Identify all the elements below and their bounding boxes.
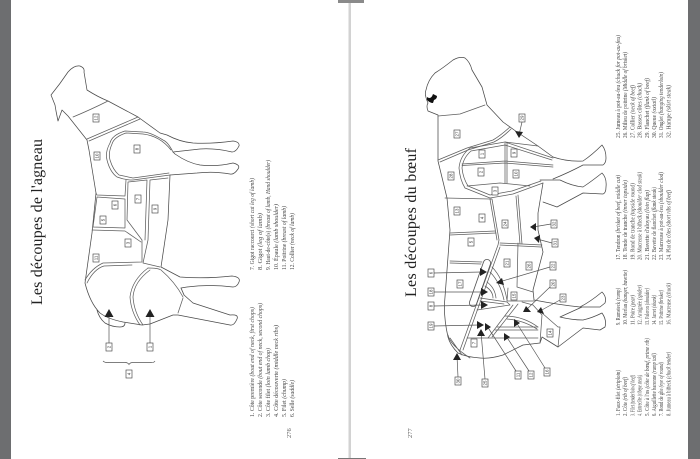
beef cuts list, column 4: 31. Onglet (hanging tenderloin) [658, 72, 665, 138]
lamb cuts list: 4. Côte découverte (middle neck ribs) [273, 325, 280, 417]
lamb number boxes: 7 [136, 197, 140, 200]
beef number boxes: 4 [480, 216, 484, 219]
beef cuts list, column 1: 2. Côte (rib of beef) [622, 377, 629, 416]
beef number boxes: 28 [448, 173, 454, 178]
beef cuts list, column 3 [615, 172, 672, 260]
beef number boxes: 30 [456, 378, 460, 383]
beef muzzle [427, 94, 437, 103]
lamb number boxes: 6 [112, 203, 118, 206]
beef cuts list, column 3: 20. Macreuse à bifteck (shoulder clod steak) [636, 172, 644, 260]
beef cuts list, column 2 [615, 270, 672, 325]
lamb number boxes: 4 [126, 372, 132, 375]
lamb number boxes: 12 [94, 115, 98, 120]
lamb brace [103, 361, 155, 364]
beef cuts list, column 2: 16. Macreuse (chuck) [666, 283, 672, 325]
page spine [338, 0, 366, 459]
beef cuts list, column 2: 14. Jarret (shank) [651, 295, 658, 325]
lamb number boxes: 10 [94, 153, 100, 158]
lamb number boxes [93, 114, 158, 378]
beef cuts list, column 1: 3. Filet (tenderloin of beef) [630, 375, 636, 416]
beef cuts list, column 4: 29. Flanchet (flank of beef) [644, 78, 651, 138]
lamb cuts list [249, 160, 296, 417]
beef cuts list, column 1: 1. Faux-filet (striploin) [615, 370, 622, 416]
lamb cuts list: 12. Collier (neck of lamb) [289, 213, 296, 270]
beef cuts list, column 4 [615, 35, 672, 138]
beef cuts list, column 3: 17. Tendron (brisket of beef, middle cut) [615, 175, 622, 260]
beef number boxes: 16 [544, 369, 550, 374]
beef number boxes: 17 [458, 281, 462, 286]
beef cuts list, column 3: 19. Rond de tranche (topside round) [630, 183, 636, 260]
beef number boxes: 26 [526, 263, 532, 268]
beef cuts list, column 1: 7. Rond de gîte (eye of round) [658, 362, 665, 416]
beef cuts list, column 3: 21. Bavette d'aloyau (loin flap) [644, 190, 651, 260]
beef pill-shaped cut [473, 263, 487, 303]
beef number boxes: 13 [454, 208, 460, 213]
page number 277: 277 [407, 428, 414, 438]
lamb diagram [51, 66, 239, 378]
beef number boxes: 3 [492, 189, 498, 192]
beef number boxes: 22 [550, 263, 556, 268]
beef number boxes: 11 [516, 372, 520, 377]
lamb number boxes: 9 [152, 207, 158, 210]
beef cuts list, column 4: 26. Milieu de poitrine (Middle of brisket) [622, 52, 629, 138]
beef diagram [425, 57, 606, 387]
title: beef cuts: Les découpes du bœuf [403, 147, 420, 297]
lamb cuts list: 9. Haut-de-côte(s) (breast of lamb, Hand shoulder) [265, 160, 272, 270]
beef number boxes: 21 [504, 260, 510, 265]
lamb cuts list: 6. Selle (saddle) [289, 380, 296, 417]
beef number boxes: 27 [454, 131, 460, 136]
beef cuts list, column 3: 18. Tende de tranche (inner topside) [622, 180, 629, 260]
beef number boxes: 9 [512, 151, 516, 154]
beef cuts list, column 1: 4. Entrecôte (ribeye steak) [636, 375, 644, 416]
beef number boxes: 29 [520, 115, 524, 120]
left page edge [0, 0, 11, 459]
beef cuts list, column 3: 22. Bavette de flanchet (flank steak) [651, 187, 658, 260]
lamb cuts list: 7. Gigot raccourci (short cut leg of lamb) [249, 178, 256, 270]
beef cut lines [438, 105, 560, 358]
beef number boxes: 1 [480, 152, 484, 155]
lamb tail [97, 310, 125, 327]
lamb cuts list: 11. Poitrine (breast of lamb) [281, 206, 288, 270]
beef number boxes: 24 [502, 221, 508, 226]
beef number boxes: 2 [478, 170, 484, 173]
beef cuts list, column 4: 27. Collier (neck of beef) [630, 85, 636, 138]
beef number boxes: 20 [550, 281, 556, 286]
lamb cuts list: 5. Filet (chump) [281, 379, 288, 417]
beef arrows [434, 122, 560, 379]
beef cuts list, column 1: 6. Aiguillette baronne (rump tail) [651, 353, 658, 416]
beef cuts list, column 1: 8. Jumeau à bifteck (chuck tender) [666, 352, 672, 416]
beef number boxes: 12 [528, 372, 534, 377]
beef number boxes: 23 [560, 295, 566, 300]
beef number boxes: 19 [428, 323, 434, 328]
lamb outline [51, 66, 239, 325]
beef number boxes: 14 [548, 330, 552, 335]
beef number boxes: 10 [514, 171, 518, 176]
lamb cuts list: 2. Côte seconde (bout end of neck, second chops) [257, 303, 264, 417]
beef number boxes: 15 [512, 293, 516, 298]
beef cuts list, column 2: 9. Rumsteck (rump) [615, 288, 622, 325]
beef cuts list, column 2: 13. Paleron (shoulder) [644, 288, 651, 325]
lamb number boxes: 3 [126, 241, 130, 244]
beef number boxes: 31 [552, 240, 558, 245]
beef cuts list, column 4: 25. Jumeau à pot-au-feu (chuck for pot-au-feu) [615, 35, 622, 138]
beef cuts list, column 4: 30. Queue (oxtail) [651, 97, 658, 138]
lamb number boxes: 8 [134, 147, 140, 150]
beef number boxes: 5 [468, 240, 474, 243]
beef number boxes: 25 [482, 380, 488, 385]
beef number boxes: 7 [472, 341, 476, 344]
lamb cuts list: 8. Gigot (leg of lamb) [257, 213, 264, 270]
beef number boxes [428, 114, 566, 387]
beef cuts list, column 3: 23. Macreuse à pot-au-feu (shoulder clod) [658, 172, 665, 260]
lamb arrows [104, 309, 154, 343]
beef cuts list, column 2: 10. Merlan (hanger, bavette) [622, 270, 629, 325]
beef cuts list, column 4: 32. Hampe (skirt steak) [666, 85, 672, 138]
lamb cuts list: 10. Épaule (lamb shoulder) [272, 204, 280, 270]
beef number boxes: 6 [428, 271, 434, 274]
title: lamb cuts: Les découpes de l'agneau [29, 139, 46, 305]
page number 276: 276 [286, 428, 293, 438]
lamb number boxes: 11 [94, 255, 98, 260]
beef cuts list, column 4: 28. Basses côtes (chuck) [636, 83, 644, 138]
beef cuts list, column 2: 15. Poitrine (brisket) [658, 290, 665, 325]
lamb number boxes: 1 [148, 345, 152, 348]
lamb number boxes: 2 [106, 345, 112, 348]
lamb cuts list: 1. Côte première (bout end of neck, first chops) [249, 307, 256, 417]
lamb cuts list: 3. Côte filet (loin lamb chop) [265, 348, 272, 417]
beef number boxes: 8 [428, 304, 434, 307]
beef outline [425, 57, 606, 358]
lamb cut lines [73, 101, 184, 325]
beef cuts list, column 1: 5. Côte à l'os (côte de bœuf, prime rib) [644, 338, 651, 416]
lamb number boxes: 5 [100, 218, 106, 221]
right page edge [688, 0, 700, 459]
beef number boxes: 18 [428, 289, 434, 294]
beef cuts list, column 2: 12. Araignée (spider) [636, 285, 644, 325]
beef cuts list, column 3: 24. Plat de côtes (short ribs of beef) [666, 190, 672, 260]
beef number boxes: 32 [552, 221, 556, 226]
beef cuts list, column 1 [615, 338, 672, 416]
beef cuts list, column 2: 11. Poire (pear) [630, 295, 636, 325]
